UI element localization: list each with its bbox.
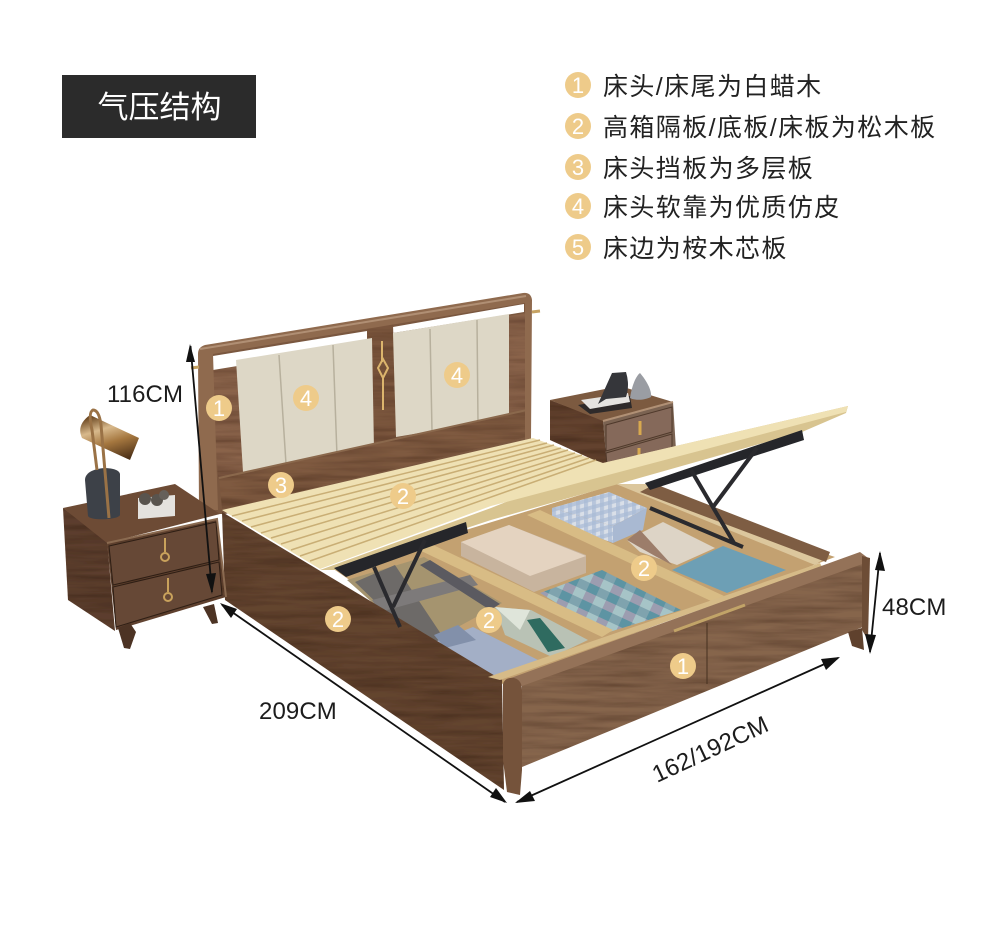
badge 4 right: 4: [451, 363, 463, 388]
far lift bracket: [645, 430, 804, 547]
gold bar handle: [674, 605, 745, 631]
legend item 4: 4: [572, 194, 584, 219]
material legend: [565, 72, 936, 263]
callout badges: [206, 362, 696, 679]
badge 4 left: [293, 385, 319, 411]
footboard: [488, 552, 870, 795]
badge 1 footboard: 1: [677, 654, 689, 679]
dimension label 162/192CM: 162/192CM: [648, 711, 773, 788]
legend item 5: 床边为桉木芯板: [603, 235, 788, 263]
height arrow 116CM: [186, 344, 216, 594]
badge 2 divider: 2: [483, 608, 495, 633]
left wood panel: [210, 366, 243, 478]
patchwork quilt: [540, 570, 681, 633]
legend item 1: 床头/床尾为白蜡木: [603, 73, 823, 101]
folded blanket: [627, 522, 715, 565]
badge 2 slats: 2: [397, 484, 409, 509]
lifted slat platform: [222, 406, 848, 627]
height arrow 48CM: [865, 551, 885, 654]
badge 1 headboard: [206, 395, 232, 421]
legend item 2: 高箱隔板/底板/床板为松木板: [603, 114, 936, 142]
length arrow 209CM: [220, 603, 507, 803]
blue pillow: [672, 546, 786, 593]
badge 2 divider: [476, 607, 502, 633]
legend item 5: 5: [572, 235, 584, 260]
headboard openings: [213, 304, 524, 370]
left side panel: [222, 512, 504, 790]
striped shirt: [495, 607, 588, 657]
badge 2 side: 2: [332, 607, 344, 632]
badge 4 right: [444, 362, 470, 388]
legend item 4: 床头软靠为优质仿皮: [603, 194, 841, 222]
interior of storage box: [335, 484, 835, 684]
right cushion: [393, 314, 509, 437]
drawer pulls: [161, 538, 172, 601]
title box: [62, 75, 256, 138]
right wood panel: [509, 313, 527, 414]
badge 2 side: [325, 606, 351, 632]
dimension label 116CM: 116CM: [107, 381, 183, 408]
slat surface: [222, 406, 848, 569]
gingham box: [552, 492, 647, 543]
platform underside: [320, 406, 848, 570]
storage dividers: [417, 510, 724, 637]
right nightstand: [550, 372, 676, 467]
foot post: [503, 678, 522, 795]
badge 2 slats: [390, 483, 416, 509]
left cushion: [236, 338, 374, 472]
headboard lower wood: [206, 298, 531, 514]
legend item 2: 2: [572, 114, 584, 139]
width arrow 162/192CM: [515, 657, 840, 803]
book and pinecones: [138, 490, 175, 519]
badge 2 rear: [631, 555, 657, 581]
headboard top frame: [198, 293, 532, 510]
title box: 气压结构: [98, 90, 222, 125]
dimension arrows: [186, 344, 885, 803]
left nightstand: [63, 410, 226, 649]
dimension label 48CM: 48CM: [882, 594, 946, 621]
legend item 3: 床头挡板为多层板: [603, 155, 814, 183]
badge 2 rear: 2: [638, 556, 650, 581]
folded sweaters: [461, 525, 586, 592]
blue shirt: [432, 625, 538, 678]
lamp: [80, 410, 139, 519]
far side wall: [616, 484, 825, 565]
gold ornament: [378, 341, 388, 410]
legend item 1: 1: [572, 73, 584, 98]
headboard: [191, 293, 540, 514]
badge 1 headboard: 1: [213, 396, 225, 421]
legend item 3: 3: [572, 155, 584, 180]
badge 1 footboard: [670, 653, 696, 679]
badge 4 left: 4: [300, 386, 312, 411]
near lift bracket: [334, 522, 468, 627]
plaid bedding: [347, 557, 502, 645]
dimension label 209CM: 209CM: [259, 698, 337, 725]
headboard baffle: [219, 410, 527, 510]
badge 3: 3: [275, 473, 287, 498]
badge 3: [268, 472, 294, 498]
books and vase: [578, 372, 651, 414]
center post: [367, 324, 396, 444]
